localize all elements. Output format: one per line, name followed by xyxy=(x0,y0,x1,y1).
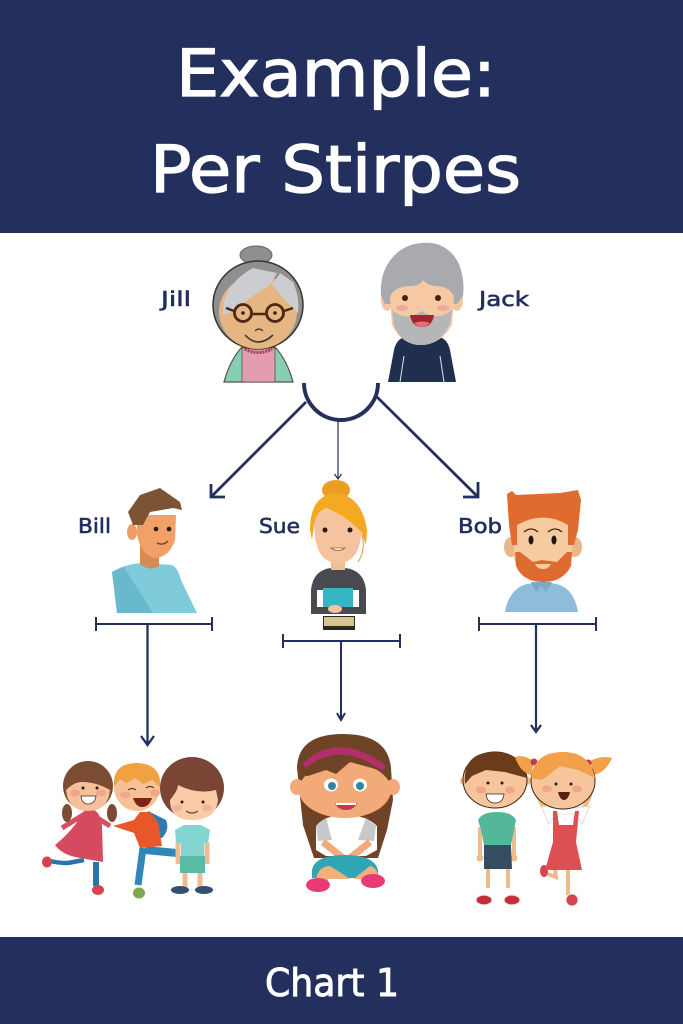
bracket: Sue's child xyxy=(283,634,400,720)
arrow: to Sue xyxy=(334,420,342,479)
icon: Jill grandmother xyxy=(213,246,303,382)
arrow: Sue to child xyxy=(337,641,345,720)
icon: Bob xyxy=(504,490,582,612)
icon: Sue xyxy=(310,480,367,630)
bracket: Bill's children xyxy=(96,617,212,745)
bracket: Bob's children xyxy=(479,617,596,732)
child: boy in green shirt xyxy=(460,752,531,905)
child: boy with backpack xyxy=(113,763,177,898)
child: boy in teal shirt xyxy=(160,757,224,894)
title line 1: Example: xyxy=(176,37,496,112)
icon: Bill xyxy=(112,488,197,613)
icon: Bob's two children xyxy=(460,752,612,906)
footer label: Chart 1 xyxy=(265,961,399,1005)
label: Jack: Jack xyxy=(477,287,530,311)
label: Sue: Sue xyxy=(259,514,300,538)
arrow: Bill to children xyxy=(141,624,154,745)
icon: Jack grandfather xyxy=(381,243,464,382)
child: girl with pigtails xyxy=(515,752,612,906)
connector: union arc xyxy=(304,383,378,420)
header banner xyxy=(0,0,683,233)
arrow: Bob to children xyxy=(531,624,541,732)
child: girl in red dress xyxy=(42,761,117,895)
label: Jill: Jill xyxy=(158,287,191,311)
label: Bob: Bob xyxy=(458,514,502,538)
label: Bill: Bill xyxy=(78,514,111,538)
arrow: to Bob xyxy=(377,397,478,497)
icon: Bill's three children xyxy=(42,757,224,898)
arrow: to Bill xyxy=(211,402,306,497)
footer banner xyxy=(0,937,683,1024)
title line 2: Per Stirpes xyxy=(150,133,521,208)
icon: Sue's child, seated girl xyxy=(290,734,400,892)
